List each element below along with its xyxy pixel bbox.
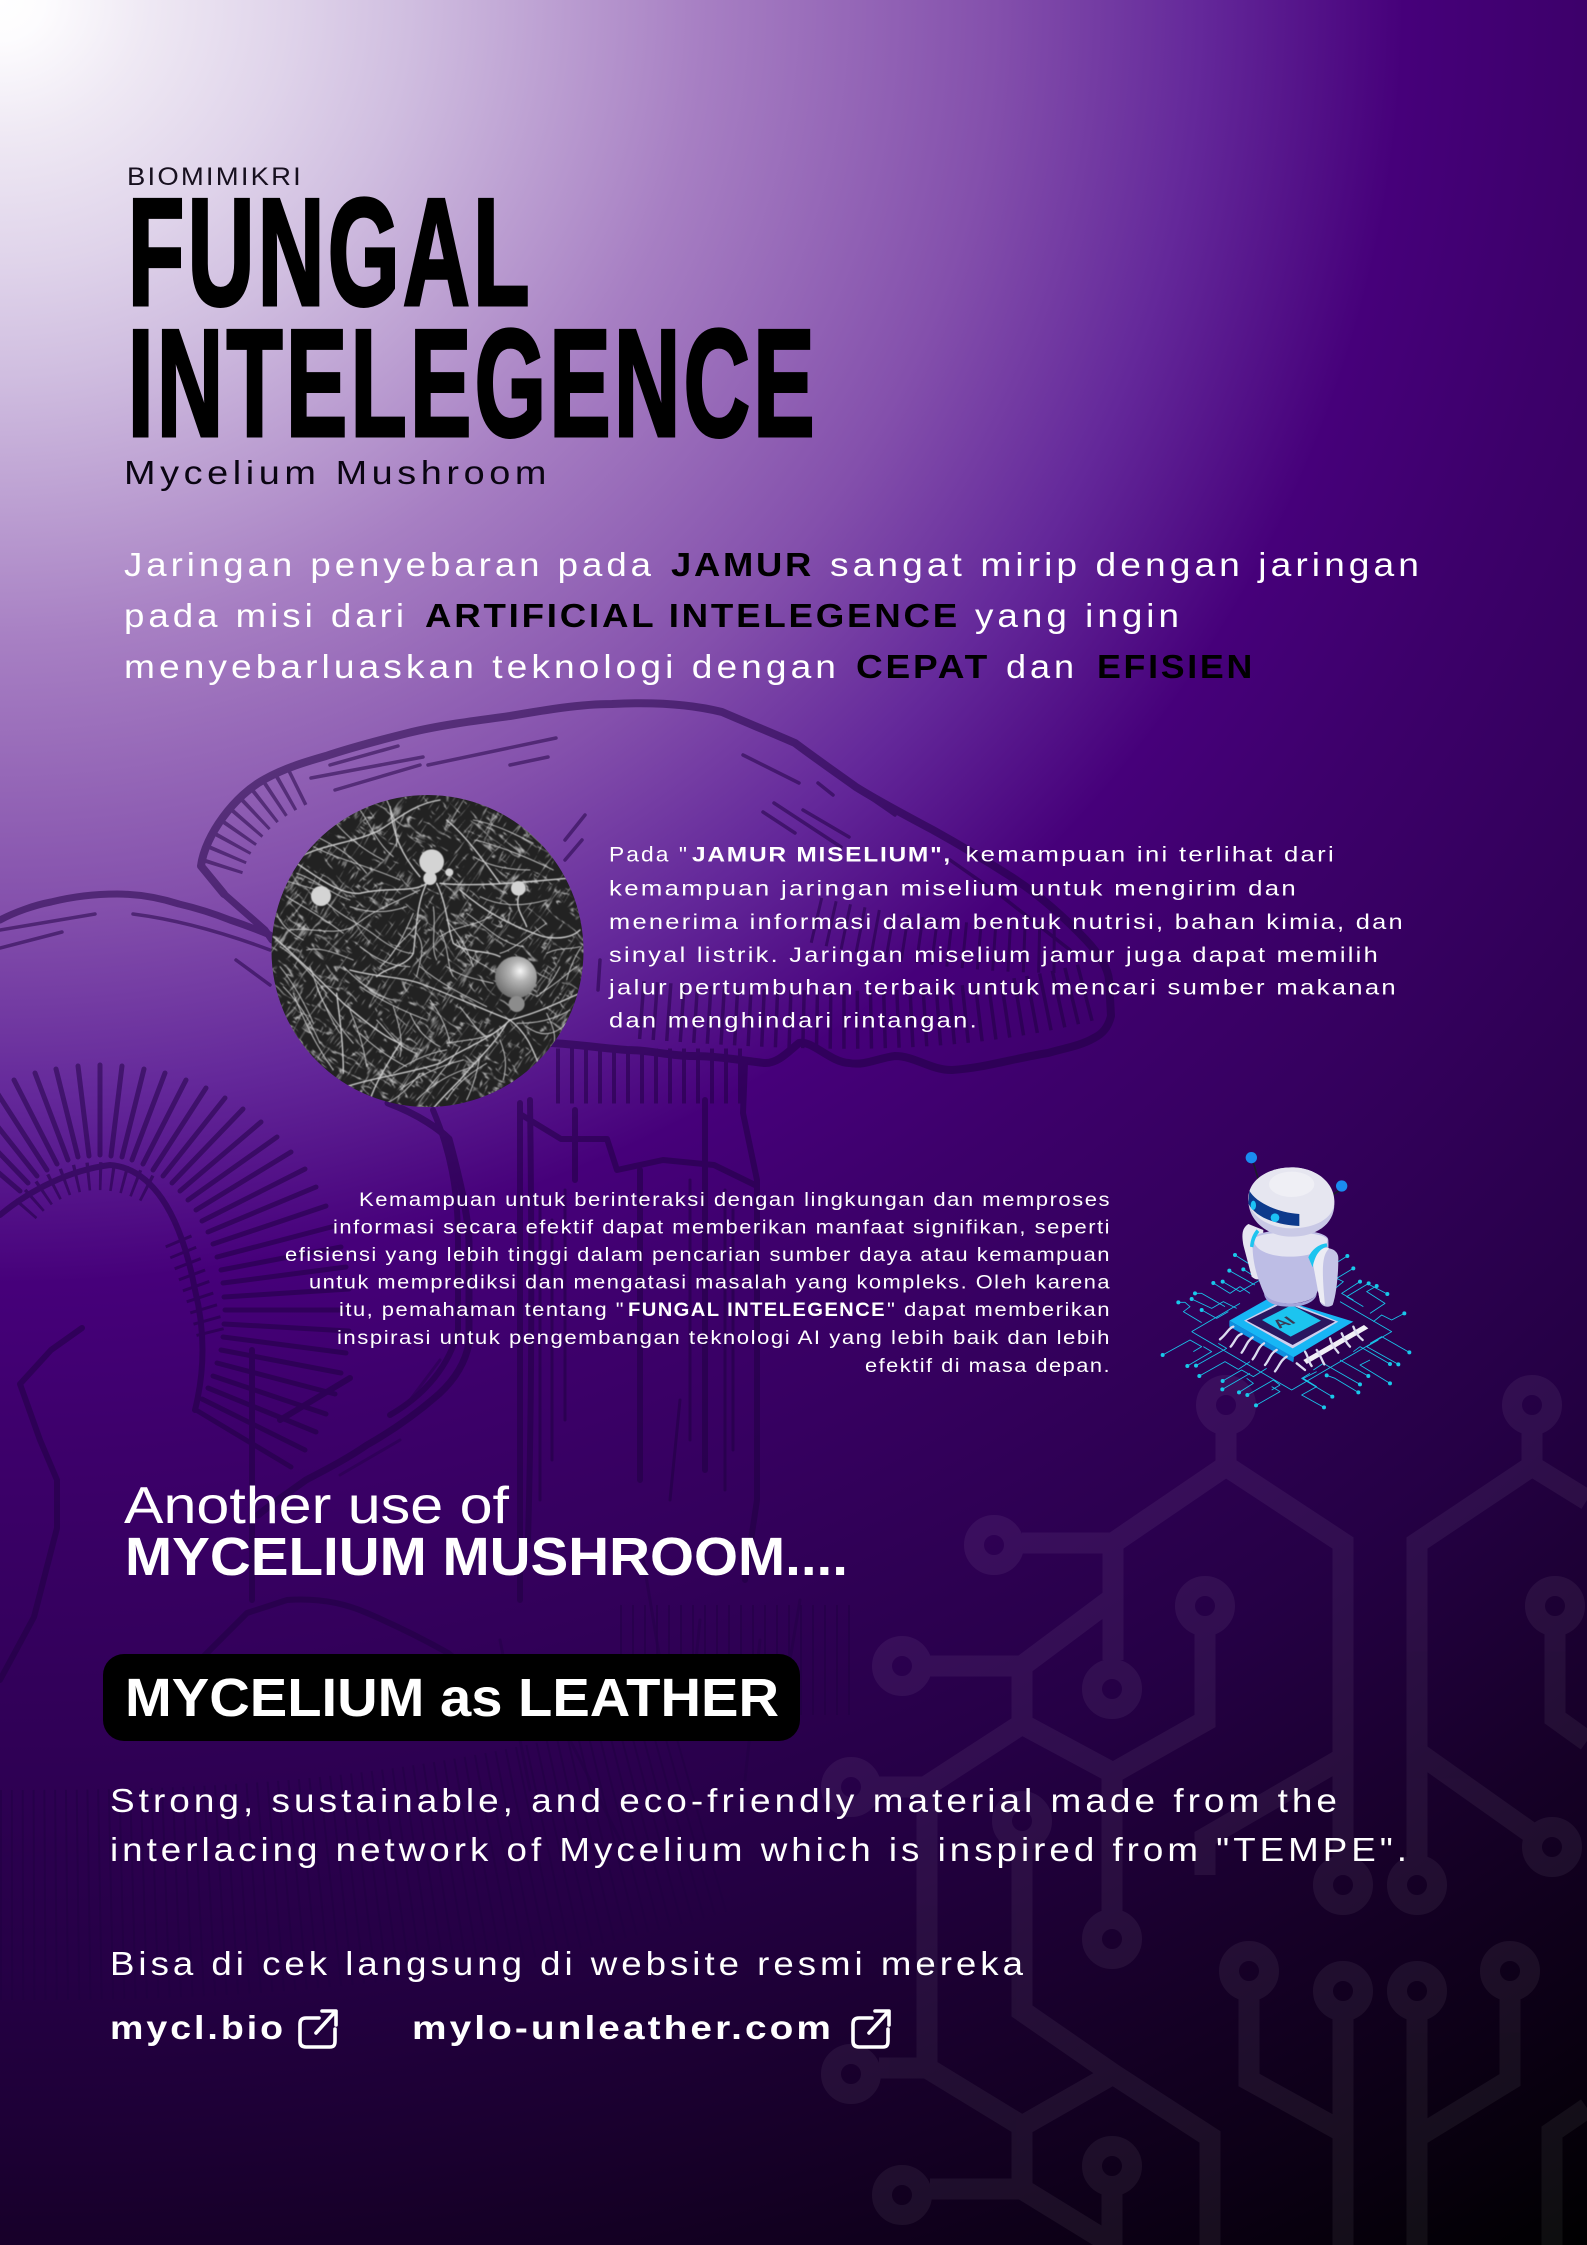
background: mushroom line drawing (0, 703, 1111, 1895)
description: leather material (110, 1782, 1411, 1868)
paragraph: Jamur Miselium (608, 844, 1405, 1032)
paragraph: Jamur Miselium: jalur pertumbuhan terbaik untuk mencari sumber makanan (608, 976, 1398, 1000)
heading: Another use of Mycelium Mushroom (124, 1477, 848, 1587)
intro paragraph: JAMUR (671, 546, 814, 583)
paragraph: Fungal Intelegence: untuk memprediksi dan mengatasi masalah yang kompleks. Oleh karena (309, 1272, 1111, 1294)
paragraph: Fungal Intelegence: efisiensi yang lebih tinggi dalam pencarian sumber daya atau kemampuan (285, 1245, 1111, 1266)
description: leather material: interlacing network of Mycelium which is inspired from "TEMPE". (110, 1831, 1411, 1868)
subtitle label: BIOMIMIKRI: BIOMIMIKRI (127, 163, 303, 191)
title: FUNGAL INTELEGENCE: FUNGAL (128, 168, 533, 338)
paragraph: Fungal Intelegence: inspirasi untuk pengembangan teknologi AI yang lebih baik dan lebih (337, 1328, 1111, 1349)
paragraph: Jamur Miselium: kemampuan ini terlihat dari (966, 844, 1336, 866)
intro paragraph: dan (1006, 648, 1078, 685)
intro paragraph: sangat mirip dengan jaringan (830, 546, 1423, 583)
photo: mycelium network circle (272, 795, 584, 1107)
paragraph: Jamur Miselium: sinyal listrik. Jaringan miselium jamur juga dapat memilih (609, 944, 1380, 967)
microchip (1220, 1297, 1368, 1371)
circuit traces around the chip (1161, 1253, 1411, 1409)
intro paragraph: CEPAT (856, 648, 990, 685)
intro paragraph: ARTIFICIAL INTELEGENCE (425, 597, 960, 634)
right arm (1308, 1243, 1338, 1307)
paragraph: Fungal Intelegence: informasi secara efektif dapat memberikan manfaat signifikan, seperti (333, 1218, 1111, 1238)
gills of the left mushroom (0, 1065, 350, 1467)
website note: Bisa di cek langsung di website resmi mereka (110, 1945, 1027, 1982)
title: FUNGAL INTELEGENCE: INTELEGENCE (128, 298, 818, 468)
antennas (1246, 1152, 1347, 1210)
icon: external link (853, 2011, 889, 2047)
intro paragraph: yang ingin (975, 597, 1183, 634)
paragraph: Fungal Intelegence (285, 1190, 1111, 1377)
link: mycl.bio: mycl.bio (110, 2009, 286, 2046)
paragraph: Jamur Miselium: menerima informasi dalam bentuk nutrisi, bahan kimia, dan (609, 911, 1405, 934)
paragraph: Jamur Miselium: Pada " (609, 844, 689, 866)
microchip: AI (1267, 1314, 1300, 1331)
heading: Another use of Mycelium Mushroom: Another use of (124, 1477, 510, 1535)
paragraph: Fungal Intelegence: " dapat memberikan (887, 1300, 1111, 1321)
intro paragraph: pada misi dari (124, 597, 408, 634)
robot head (1248, 1167, 1334, 1237)
label pill: Mycelium as Leather: MYCELIUM as LEATHER (125, 1668, 779, 1728)
background: circuit board pattern (831, 1385, 1587, 2245)
paragraph: Fungal Intelegence: FUNGAL INTELEGENCE (628, 1300, 886, 1321)
paragraph: Jamur Miselium: dan menghindari rintangan. (609, 1010, 979, 1032)
link: mylo-unleather.com: mylo-unleather.com (412, 2009, 834, 2046)
paragraph: Fungal Intelegence: efektif di masa depan. (865, 1356, 1111, 1377)
paragraph: Fungal Intelegence: Kemampuan untuk berinteraksi dengan lingkungan dan memproses (359, 1190, 1111, 1211)
paragraph: Jamur Miselium: JAMUR MISELIUM", (692, 844, 952, 866)
label pill: Mycelium as Leather (103, 1654, 800, 1741)
paragraph: Fungal Intelegence: itu, pemahaman tentang " (339, 1300, 625, 1321)
icon: external link (300, 2011, 336, 2047)
left arm (1242, 1224, 1263, 1279)
illustration: AI robot on a chip (1161, 1152, 1411, 1409)
robot body (1250, 1229, 1328, 1307)
intro paragraph: Jaringan penyebaran pada (124, 546, 655, 583)
description: leather material: Strong, sustainable, and eco-friendly material made from the (110, 1782, 1341, 1819)
link: mycl.bio (110, 2009, 336, 2047)
intro paragraph: menyebarluaskan teknologi dengan (124, 648, 840, 685)
paragraph: Jamur Miselium: kemampuan jaringan miselium untuk mengirim dan (609, 878, 1298, 900)
subtitle: Mycelium Mushroom: Mycelium Mushroom (124, 454, 551, 491)
intro paragraph: EFISIEN (1097, 648, 1255, 685)
title: FUNGAL INTELEGENCE (128, 168, 818, 468)
intro paragraph (124, 546, 1423, 685)
heading: Another use of Mycelium Mushroom: MYCELIUM MUSHROOM.... (125, 1527, 848, 1587)
